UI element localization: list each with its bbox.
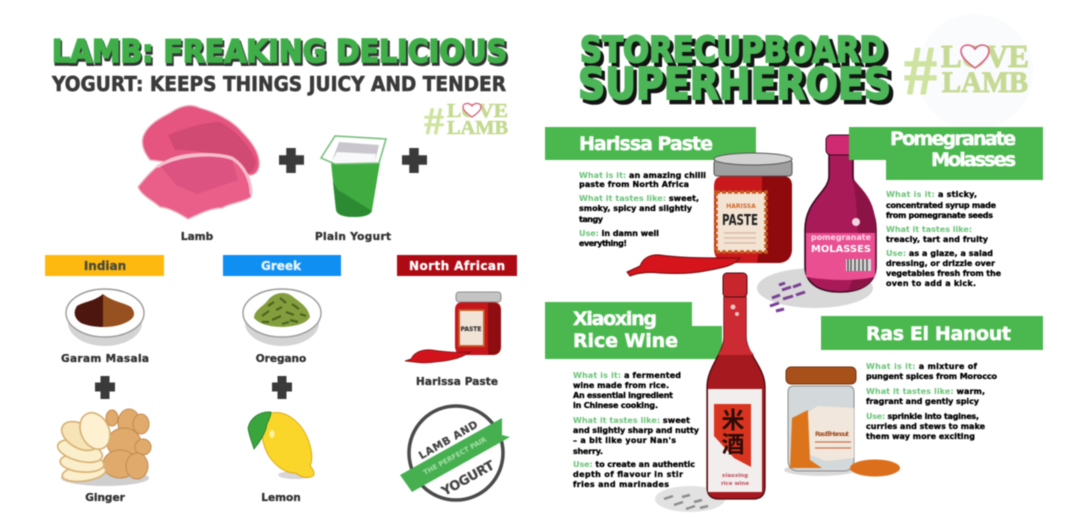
text: xiaoxing details: wine made from rice. [573, 381, 669, 390]
text: ras el hanout details: curries and stews to make [866, 422, 986, 431]
icon: harissa jar small: PASTE [460, 326, 482, 333]
text: pomegranate molasses details: oven to add a kick. [886, 279, 976, 288]
text: pomegranate molasses details: concentrated syrup made [886, 201, 997, 210]
icon: pomegranate molasses bottle: MOLASSES [811, 244, 871, 255]
text: harissa paste details: Use: in damn well [579, 229, 659, 238]
column: greek [223, 255, 341, 504]
logo: love lamb large: # [904, 33, 937, 110]
banner: north african [397, 255, 517, 276]
banner: north african: North African [409, 259, 505, 273]
panel: xiaoxing rice wine [545, 273, 765, 512]
label: harissa paste: Harissa Paste [416, 376, 498, 388]
icon: harissa jar small [405, 292, 501, 363]
text: xiaoxing details: An essential ingredient [573, 391, 673, 400]
icon: spice pile [850, 460, 900, 476]
text: xiaoxing details: – a bit like your Nan's [573, 436, 676, 445]
icon: rice wine bottle: rice wine [721, 481, 749, 487]
panel: ras el hanout [784, 316, 1043, 476]
text: pomegranate molasses details: from pomegranate seeds [886, 211, 993, 220]
pale circle behind logo [917, 14, 1033, 130]
panel: harissa paste [545, 127, 792, 276]
text: pomegranate molasses details: What is it: a sticky, [886, 190, 977, 199]
panel: pomegranate molasses [757, 127, 1043, 311]
stamp: lamb and yogurt the perfect pair: LAMB AND [417, 419, 480, 462]
subtitle: YOGURT: KEEPS THINGS JUICY AND TENDER [51, 72, 506, 96]
label: ginger: Ginger [85, 492, 126, 504]
title: storecupboard superheroes: SUPERHEROES [578, 59, 891, 110]
right panel: storecupboard superheroes [545, 14, 1043, 512]
logo: love lamb large: LOVE [941, 38, 1029, 74]
banner: greek [223, 255, 341, 276]
text: ras el hanout details: What it tastes like: warm, [866, 387, 985, 396]
banner: indian [45, 255, 164, 276]
label: oregano: Oregano [256, 353, 306, 365]
text: xiaoxing details: What it tastes like: sweet [573, 416, 690, 425]
shadow and seeds [757, 268, 873, 311]
banner: pomegranate molasses [849, 127, 1043, 180]
text: ras el hanout details: them way more exciting [866, 432, 975, 441]
icon: rice wine bottle: 米 [722, 407, 744, 433]
banner: ras el hanout [821, 316, 1043, 350]
text: xiaoxing details [573, 371, 700, 489]
left panel: lamb and yogurt [45, 34, 517, 504]
icon: plus [272, 376, 292, 399]
icon: ginger [55, 408, 151, 486]
banner: xiaoxing rice wine: Xiaoxing [573, 308, 657, 330]
title: lamb freaking delicious: LAMB: FREAKING DELICIOUS [52, 34, 507, 70]
icon: garam masala plate [66, 289, 144, 346]
title: storecupboard superheroes: SUPERHEROES [581, 63, 895, 114]
logo: love lamb small: LAMB [447, 117, 508, 139]
text: pomegranate molasses details: What it tastes like: [886, 225, 972, 234]
title: lamb freaking delicious: LAMB: FREAKING DELICIOUS [53, 36, 509, 72]
title: storecupboard superheroes [578, 30, 895, 114]
text: ras el hanout details [866, 362, 998, 441]
text: harissa paste details: everything! [579, 239, 627, 248]
text: harissa paste details: What is it: an amazing chilli [579, 171, 706, 180]
icon: pomegranate molasses bottle [805, 135, 876, 292]
banner: xiaoxing rice wine: Rice Wine [573, 330, 678, 352]
column: north african [397, 255, 517, 500]
icon: harissa jar [714, 153, 792, 263]
icon: spice jar: Ras El Hanout [815, 430, 849, 438]
title: storecupboard superheroes: STORECUPBOARD [583, 34, 889, 75]
icon: spice jar [784, 367, 856, 476]
text: xiaoxing details: Use: to create an authentic [573, 460, 695, 469]
text: harissa paste details [579, 171, 706, 248]
label: lamb: Lamb [181, 231, 214, 243]
icon: oregano plate [243, 289, 321, 346]
icon: pomegranate molasses bottle: pomegranate [811, 233, 871, 242]
label: lemon: Lemon [261, 492, 301, 504]
logo: love lamb small: # [424, 100, 444, 143]
text: xiaoxing details: What is it: a fermented [573, 371, 681, 380]
icon: harissa jar: PASTE [722, 211, 758, 229]
text: xiaoxing details: fries and marinades [573, 480, 669, 489]
text: harissa paste details: What it tastes like: sweet, [579, 194, 699, 203]
banner: ras el hanout: Ras El Hanout [866, 323, 1011, 345]
text: pomegranate molasses details [886, 190, 1002, 288]
icon: rice wine bottle: 酒 [722, 431, 744, 457]
text: ras el hanout details: fragrant and gently spicy [866, 397, 980, 406]
banner: greek: Greek [261, 259, 302, 273]
logo: love lamb large [904, 33, 1029, 110]
text: ras el hanout details: Use: sprinkle into tagines, [866, 412, 979, 421]
banner: xiaoxing rice wine [545, 302, 722, 359]
stamp: lamb and yogurt the perfect pair [400, 406, 510, 500]
icon: rice wine bottle: xiaoxing [722, 473, 748, 479]
icon: lemon [248, 412, 314, 479]
icon: red chilli [627, 255, 740, 276]
text: xiaoxing details: sherry. [573, 447, 603, 456]
banner: pomegranate molasses: Molasses [931, 149, 1016, 171]
icon: harissa jar: HARISSA [726, 203, 756, 210]
icon: plus [279, 148, 304, 173]
text: xiaoxing details: and slightly sharp and nutty [573, 426, 700, 435]
icon: lamb steaks [138, 106, 259, 219]
stamp: lamb and yogurt the perfect pair: THE PERFECT PAIR [422, 435, 489, 477]
logo: love lamb small [424, 100, 508, 143]
banner: indian: Indian [84, 259, 126, 273]
stamp: lamb and yogurt the perfect pair: YOGURT [438, 458, 497, 500]
text: ras el hanout details: What is it: a mixture of [866, 362, 978, 371]
label: garam masala: Garam Masala [61, 353, 149, 365]
column: indian [45, 255, 164, 504]
title: storecupboard superheroes: STORECUPBOARD [580, 30, 885, 71]
text: pomegranate molasses details: dressing, or drizzle over [886, 259, 995, 268]
text: pomegranate molasses details: treacly, tart and fruity [886, 235, 989, 244]
text: xiaoxing details: in Chinese cooking. [573, 401, 658, 410]
text: pomegranate molasses details: Use: as a glaze, a salad [886, 249, 993, 258]
logo: love lamb large: LAMB [942, 66, 1028, 99]
text: ras el hanout details: pungent spices from Morocco [866, 372, 998, 381]
text: xiaoxing details: depth of flavour in stir [573, 470, 683, 479]
icon: rice wine bottle [707, 273, 765, 499]
text: harissa paste details: paste from North Africa [579, 180, 689, 189]
text: pomegranate molasses details: vegetables fresh from the [886, 269, 1002, 278]
icon: plus [402, 148, 427, 173]
icon: plus [95, 376, 115, 399]
banner: harissa paste [545, 127, 756, 160]
icon: yogurt pot [321, 136, 386, 217]
icon: rice pile [655, 486, 725, 512]
banner: pomegranate molasses: Pomegranate [890, 128, 1016, 150]
text: harissa paste details: tangy [579, 215, 604, 224]
logo: love lamb small: LOVE [447, 100, 508, 122]
label: plain yogurt: Plain Yogurt [315, 231, 391, 243]
banner: harissa paste: Harissa Paste [579, 133, 713, 155]
text: harissa paste details: smoky, spicy and slightly [579, 204, 693, 213]
